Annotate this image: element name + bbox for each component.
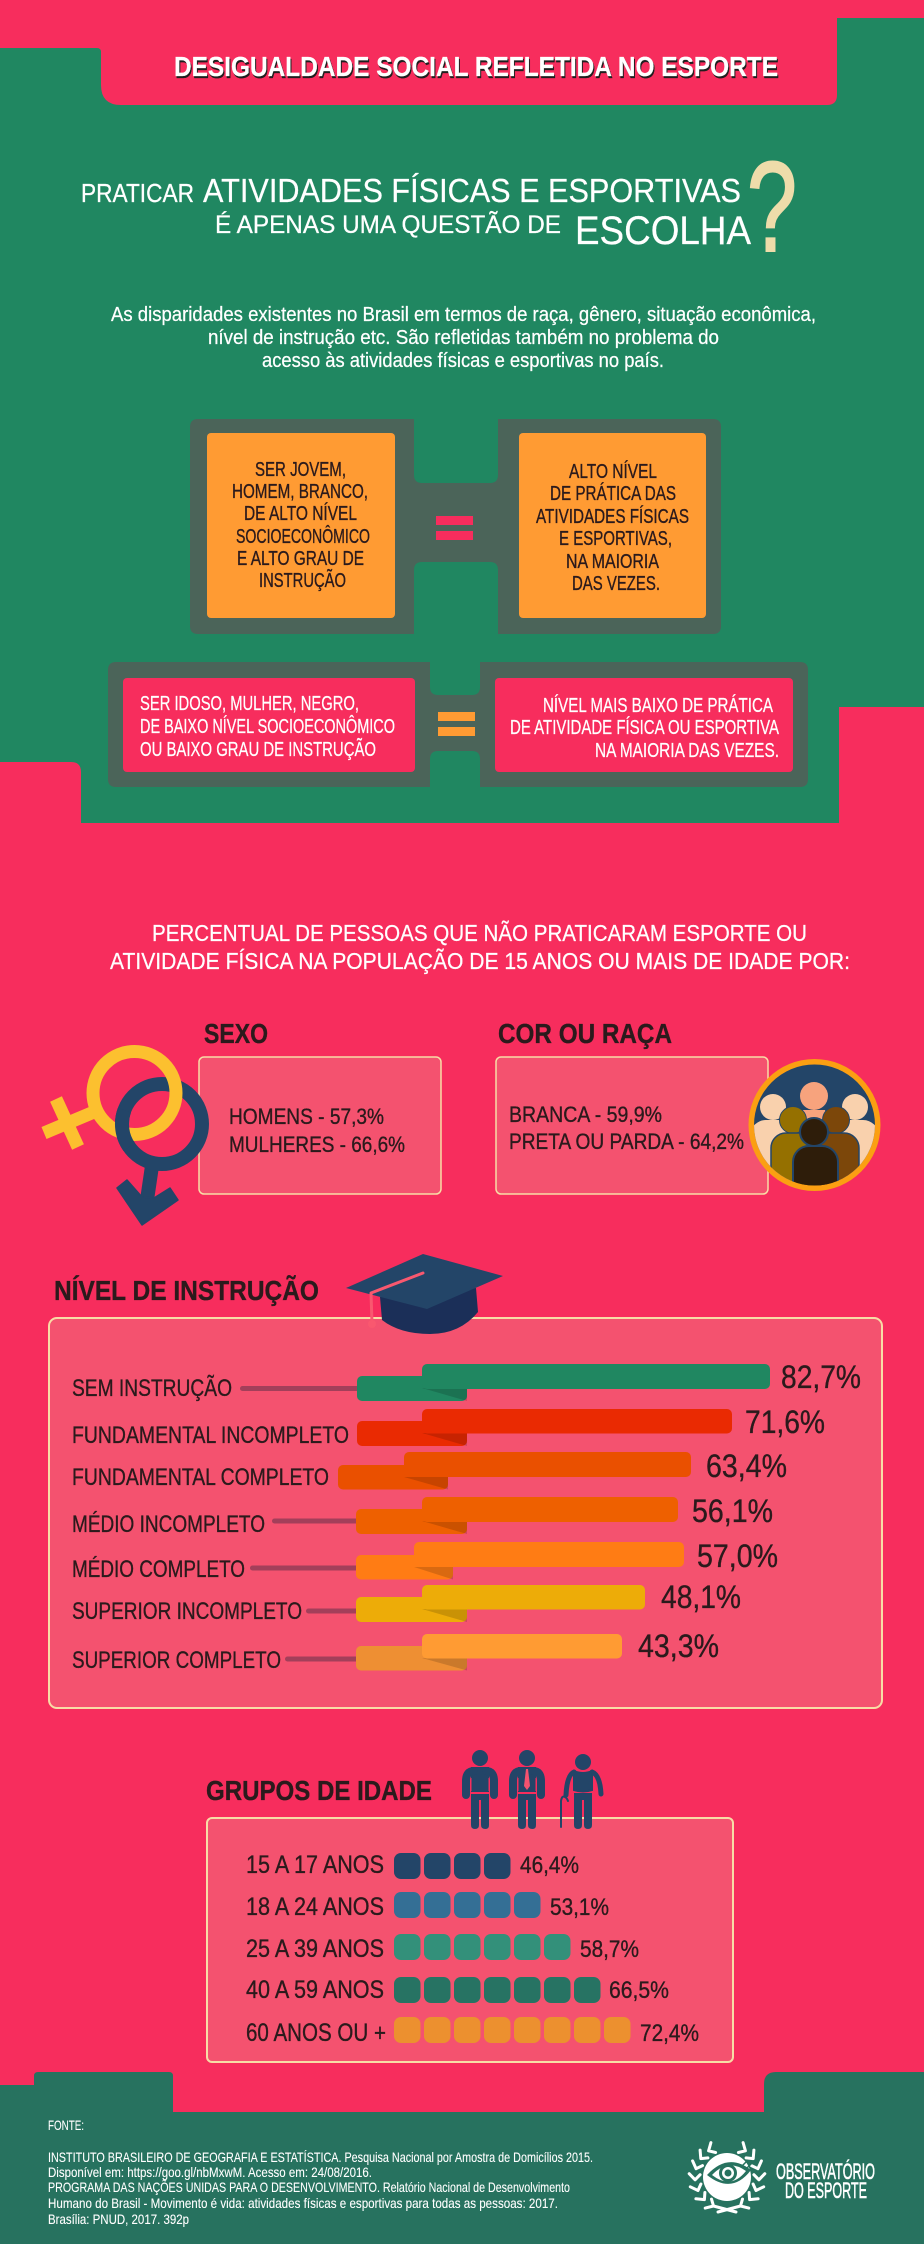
intro text: acesso às atividades físicas e esportivas no país. [262,350,664,372]
headline question: PRATICAR [81,178,194,208]
panel: low practice equation [108,662,808,787]
footer sources: FONTE: [48,2117,84,2133]
row: medio incompleto [72,1493,773,1538]
icon: group of people [748,1059,880,1204]
orange box: result: ATIVIDADES FÍSICAS [536,505,689,528]
row: 18 a 24 anos [246,1892,609,1921]
row: superior completo: 43,3% [638,1628,719,1664]
section heading: percentage: PERCENTUAL DE PESSOAS QUE NÃO PRATICARAM ESPORTE OU [152,920,807,946]
intro text: nível de instrução etc. São refletidas também no problema do [208,327,719,349]
panel: high practice equation [190,419,721,634]
intro text: As disparidades existentes no Brasil em termos de raça, gênero, situação econômica, [111,304,816,326]
panel: sexo: MULHERES - 66,6% [229,1132,405,1157]
row: 18 a 24 anos: 18 A 24 ANOS [246,1893,384,1921]
row: superior completo: SUPERIOR COMPLETO [72,1647,281,1674]
row: superior completo [72,1628,719,1674]
panel: sexo: HOMENS - 57,3% [229,1104,384,1129]
footer sources: Brasília: PNUD, 2017. 392p [48,2211,189,2227]
headline question [81,136,797,279]
row: 25 a 39 anos: 25 A 39 ANOS [246,1935,384,1963]
row: 40 a 59 anos: 40 A 59 ANOS [246,1976,384,2004]
man in sweater [466,1750,494,1829]
eye emblem [703,2153,751,2201]
headline question: É APENAS UMA QUESTÃO DE [215,210,561,239]
panel: nivel de instrucao [49,1318,882,1708]
row: sem instrucao [72,1359,861,1402]
heading: cor ou raca: COR OU RAÇA [498,1018,672,1049]
footer sources [48,2117,593,2227]
intro text [111,304,816,372]
footer sources: PROGRAMA DAS NAÇÕES UNIDAS PARA O DESENVOLVIMENTO. Relatório Nacional de Desenvolvimento [48,2179,570,2195]
title: DESIGUALDADE SOCIAL REFLETIDA NO ESPORTE [174,51,778,82]
equals sign orange [438,712,475,736]
pink box: result: DE ATIVIDADE FÍSICA OU ESPORTIVA [510,716,779,739]
headline question: ESCOLHA [575,209,751,253]
panel: cor ou raca [496,1057,768,1194]
icon: three people [466,1750,601,1829]
orange box: profile: E ALTO GRAU DE [237,548,364,570]
row: medio completo: 57,0% [697,1538,778,1574]
row: 18 a 24 anos: 53,1% [550,1894,609,1921]
pink box: profile: SER IDOSO, MULHER, NEGRO, [140,693,359,715]
pink box: profile: OU BAIXO GRAU DE INSTRUÇÃO [140,737,376,761]
panel: cor ou raca: BRANCA - 59,9% [509,1102,662,1127]
panel: grupos de idade [207,1818,733,2062]
row: fundamental completo: 63,4% [706,1448,787,1484]
green top section [0,18,924,823]
logo: observatorio do esporte [689,2143,875,2212]
footer sources: Disponível em: https://goo.gl/nbMxwM. Acesso em: 24/08/2016. [48,2164,372,2180]
row: fundamental incompleto: 71,6% [745,1404,825,1440]
pink box: profile [123,678,415,772]
orange box: profile [207,433,395,618]
orange box: result: NA MAIORIA [566,551,660,573]
row: 60 anos ou mais: 72,4% [640,2020,699,2047]
row: superior incompleto: SUPERIOR INCOMPLETO [72,1598,302,1625]
row: 40 a 59 anos [246,1976,669,2004]
row: fundamental completo [72,1448,787,1491]
icon: graduation cap [346,1254,503,1334]
orange box: result [519,433,706,618]
row: sem instrucao: SEM INSTRUÇÃO [72,1375,232,1402]
row: medio completo [72,1538,778,1583]
row: fundamental incompleto [72,1404,825,1449]
heading: nivel de instrucao: NÍVEL DE INSTRUÇÃO [54,1275,319,1306]
row: superior incompleto: 48,1% [661,1579,741,1615]
orange box: result: E ESPORTIVAS, [559,528,672,550]
panel: sexo [199,1057,441,1194]
section heading: percentage: ATIVIDADE FÍSICA NA POPULAÇÃO DE 15 ANOS OU MAIS DE IDADE POR: [110,948,850,974]
orange box: result: DAS VEZES. [572,573,660,595]
row: medio incompleto: 56,1% [692,1493,773,1529]
heading: grupos de idade: GRUPOS DE IDADE [206,1775,432,1806]
dark frame [108,662,808,787]
row: 60 anos ou mais [246,2017,699,2047]
panel: cor ou raca: PRETA OU PARDA - 64,2% [509,1129,744,1154]
orange box: profile: HOMEM, BRANCO, [232,481,368,503]
row: 25 a 39 anos: 58,7% [580,1936,639,1963]
headline question: ATIVIDADES FÍSICAS E ESPORTIVAS [203,173,741,210]
footer sources: Humano do Brasil - Movimento é vida: atividades físicas e esportivas para todas as pessoas: 2017. [48,2195,558,2211]
row: medio completo: MÉDIO COMPLETO [72,1556,245,1583]
pink box: result: NA MAIORIA DAS VEZES. [595,740,779,762]
headline question: ? [747,136,797,279]
old man with cane [561,1754,601,1829]
row: superior incompleto [72,1579,741,1625]
orange box: profile: SER JOVEM, [255,459,346,481]
orange box: profile: DE ALTO NÍVEL [244,502,357,525]
row: fundamental incompleto: FUNDAMENTAL INCOMPLETO [72,1422,349,1449]
row: 15 a 17 anos: 15 A 17 ANOS [246,1851,384,1879]
heading: sexo: SEXO [204,1018,268,1049]
row: sem instrucao: 82,7% [781,1359,861,1395]
laurel [689,2143,765,2212]
row: 15 a 17 anos: 46,4% [520,1852,579,1879]
section heading: percentage [110,920,850,974]
orange box: result: ALTO NÍVEL [569,460,657,483]
row: fundamental completo: FUNDAMENTAL COMPLETO [72,1464,329,1491]
footer [0,2072,924,2244]
equals sign pink [436,516,473,540]
orange box: profile: SOCIOECONÔMICO [236,525,370,548]
row: 40 a 59 anos: 66,5% [609,1977,669,2004]
dark frame [190,419,721,634]
row: 15 a 17 anos [246,1851,579,1879]
row: 25 a 39 anos [246,1934,639,1963]
pink box: profile: DE BAIXO NÍVEL SOCIOECONÔMICO [140,715,395,738]
row: 60 anos ou mais: 60 ANOS OU + [246,2019,386,2047]
pink box: result: NÍVEL MAIS BAIXO DE PRÁTICA [543,694,773,717]
icon: gender symbols [44,1052,202,1225]
man in tie [513,1750,541,1829]
row: medio incompleto: MÉDIO INCOMPLETO [72,1511,265,1538]
pink box: result [495,678,793,772]
orange box: result: DE PRÁTICA DAS [550,482,676,505]
orange box: profile: INSTRUÇÃO [259,568,346,592]
footer sources: INSTITUTO BRASILEIRO DE GEOGRAFIA E ESTATÍSTICA. Pesquisa Nacional por Amostra de Domicílios 2015. [48,2149,593,2165]
